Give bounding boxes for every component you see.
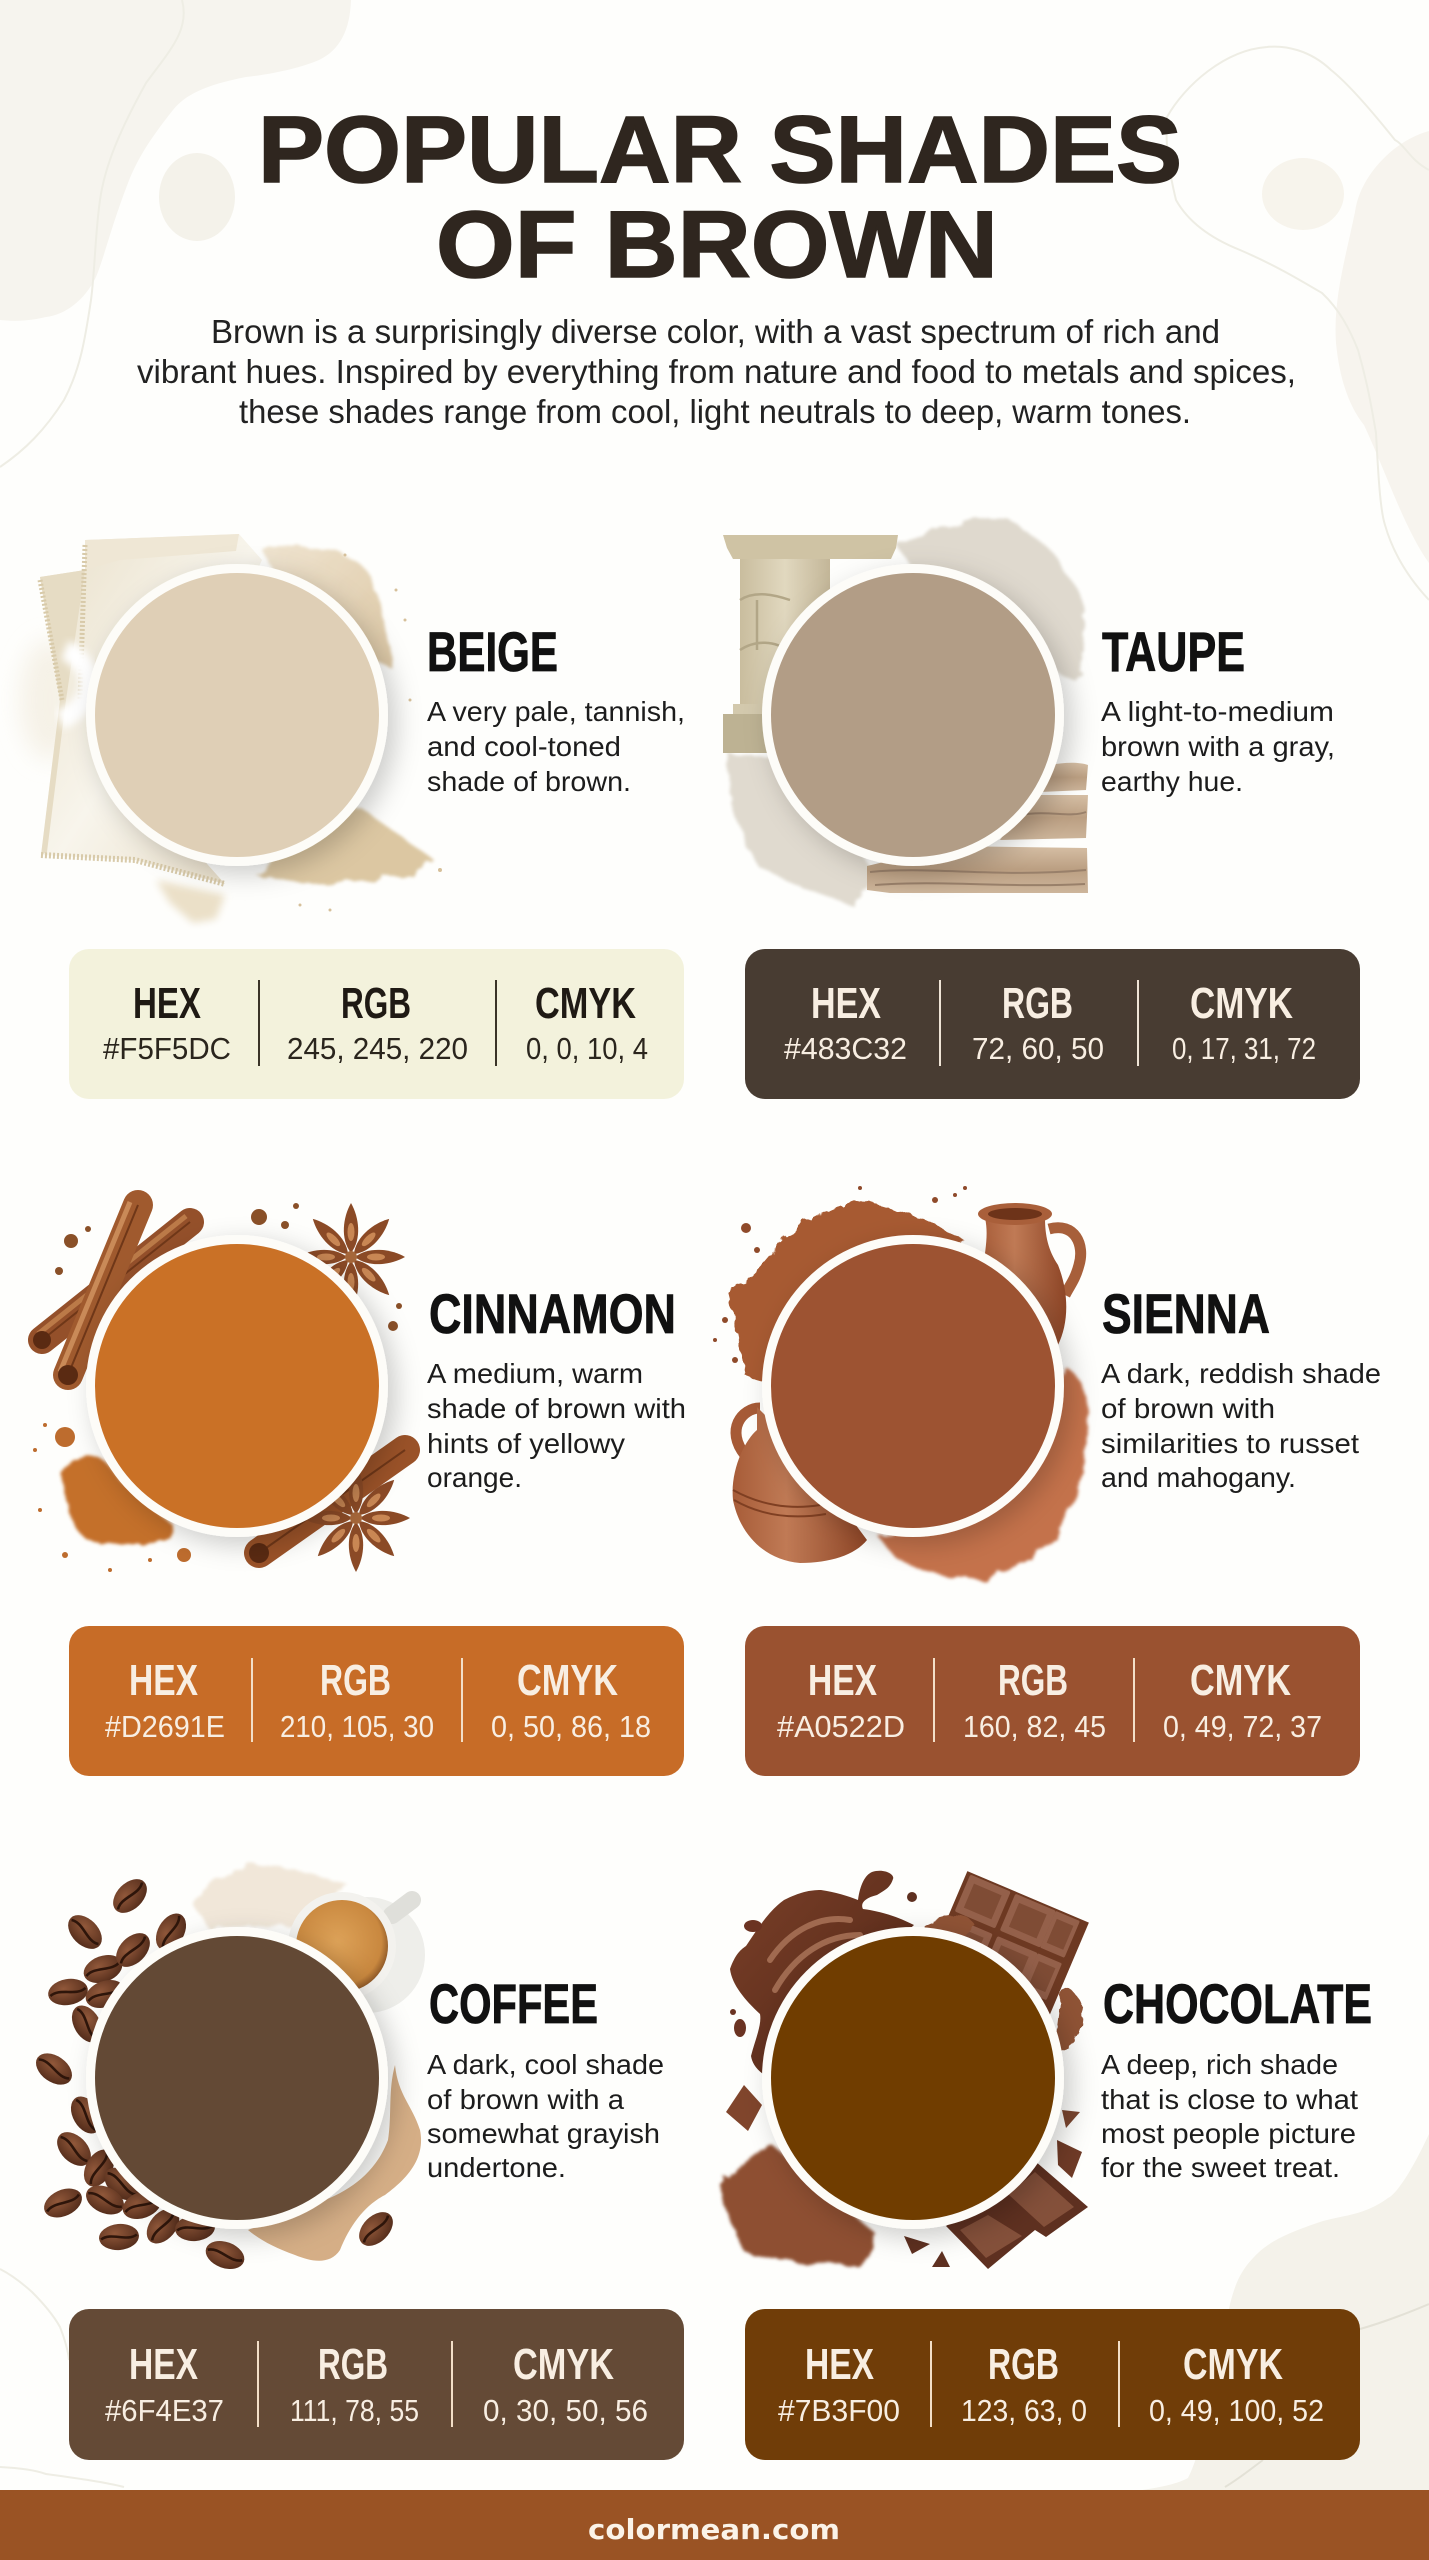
description: hints of yellowy — [427, 1428, 625, 1459]
description: orange. — [427, 1462, 522, 1493]
colour values bar: 123, 63, 0 — [961, 2393, 1087, 2428]
colour values bar: HEX — [133, 979, 201, 1028]
description — [427, 1358, 686, 1493]
description — [427, 2049, 664, 2183]
colour values bar — [745, 1626, 1360, 1776]
intro text: vibrant hues. Inspired by everything from nature and food to metals and spices, — [137, 353, 1296, 390]
colour values bar: RGB — [1002, 979, 1073, 1028]
description: brown with a gray, — [1101, 731, 1335, 762]
colour values bar: 0, 50, 86, 18 — [491, 1709, 651, 1744]
colour swatch — [90, 568, 384, 862]
colour values bar: 0, 49, 100, 52 — [1149, 2393, 1324, 2428]
illustration: linen cloth and sand — [20, 534, 442, 923]
description — [1101, 2049, 1358, 2183]
description: undertone. — [427, 2152, 566, 2183]
description: and mahogany. — [1101, 1462, 1296, 1493]
name: TAUPE — [1102, 620, 1245, 683]
description: shade of brown with — [427, 1393, 686, 1424]
description: and cool-toned — [427, 731, 621, 762]
colour values bar: CMYK — [1190, 979, 1293, 1028]
panel: chocolate — [719, 1871, 1372, 2460]
footer — [0, 2490, 1429, 2560]
description — [427, 696, 685, 797]
colour values bar: 0, 30, 50, 56 — [483, 2393, 648, 2428]
colour values bar: 0, 17, 31, 72 — [1172, 1031, 1316, 1066]
description: that is close to what — [1101, 2084, 1358, 2115]
colour swatch — [766, 1932, 1060, 2224]
description: of brown with a — [427, 2084, 624, 2115]
description: earthy hue. — [1101, 766, 1243, 797]
description: A light-to-medium — [1101, 696, 1334, 727]
description: A dark, cool shade — [427, 2049, 664, 2080]
description — [1101, 1358, 1381, 1493]
colour values bar: 210, 105, 30 — [280, 1709, 434, 1744]
colour values bar: HEX — [805, 2340, 874, 2389]
description: A very pale, tannish, — [427, 696, 685, 727]
panel: cinnamon — [33, 1202, 686, 1776]
colour values bar — [745, 2309, 1360, 2460]
colour values bar: #6F4E37 — [105, 2393, 224, 2428]
colour values bar: RGB — [318, 2340, 388, 2389]
colour values bar: CMYK — [1183, 2340, 1283, 2389]
panel: taupe — [723, 517, 1360, 1099]
colour values bar: CMYK — [513, 2340, 614, 2389]
colour values bar: #F5F5DC — [103, 1031, 231, 1066]
colour values bar — [69, 2309, 684, 2460]
panel: sienna — [713, 1186, 1381, 1776]
colour values bar: HEX — [808, 1656, 877, 1705]
colour values bar — [69, 1626, 684, 1776]
colour values bar: #A0522D — [777, 1709, 905, 1744]
description: of brown with — [1101, 1393, 1275, 1424]
title: POPULAR SHADES — [258, 97, 1182, 203]
colour values bar: HEX — [811, 979, 881, 1028]
description: A dark, reddish shade — [1101, 1358, 1381, 1389]
colour values bar: 160, 82, 45 — [963, 1709, 1106, 1744]
name: SIENNA — [1102, 1282, 1270, 1345]
illustration: clay pots and sienna pigment — [713, 1186, 1086, 1581]
description: somewhat grayish — [427, 2118, 660, 2149]
colour values bar: HEX — [129, 1656, 198, 1705]
colour values bar: 0, 49, 72, 37 — [1163, 1709, 1322, 1744]
colour values bar: RGB — [998, 1656, 1068, 1705]
description: shade of brown. — [427, 766, 631, 797]
panel: beige — [20, 534, 685, 1099]
colour values bar — [69, 949, 684, 1099]
colour values bar: #7B3F00 — [778, 2393, 900, 2428]
description: A deep, rich shade — [1101, 2049, 1338, 2080]
colour values bar: 245, 245, 220 — [287, 1031, 468, 1066]
description — [1101, 696, 1335, 797]
colour values bar: 0, 0, 10, 4 — [526, 1031, 648, 1066]
intro text: these shades range from cool, light neutrals to deep, warm tones. — [239, 393, 1191, 430]
colour values bar: RGB — [341, 979, 411, 1028]
illustration: stone column, clay and wood — [723, 517, 1088, 905]
description: similarities to russet — [1101, 1428, 1359, 1459]
illustration: chocolate bar, splash and cocoa — [719, 1871, 1089, 2269]
colour values bar — [745, 949, 1360, 1099]
intro text — [137, 313, 1296, 430]
title: OF BROWN — [436, 192, 998, 298]
colour swatch — [766, 568, 1060, 862]
colour values bar: CMYK — [517, 1656, 618, 1705]
colour values bar: 72, 60, 50 — [972, 1031, 1104, 1066]
colour values bar: RGB — [320, 1656, 391, 1705]
intro text: Brown is a surprisingly diverse color, with a vast spectrum of rich and — [211, 313, 1220, 350]
description: most people picture — [1101, 2118, 1356, 2149]
description: A medium, warm — [427, 1358, 643, 1389]
colour values bar: #D2691E — [105, 1709, 225, 1744]
name: CINNAMON — [429, 1282, 676, 1345]
title — [258, 97, 1182, 298]
colour swatch — [766, 1240, 1060, 1532]
colour values bar: 111, 78, 55 — [290, 2393, 419, 2428]
colour values bar: RGB — [988, 2340, 1059, 2389]
name: BEIGE — [427, 620, 558, 683]
illustration: cinnamon sticks, star anise and powder — [33, 1202, 410, 1572]
colour values bar: CMYK — [535, 979, 636, 1028]
panel: coffee — [30, 1865, 684, 2460]
illustration: coffee beans, cup and cream — [30, 1865, 425, 2274]
colour values bar: HEX — [129, 2340, 198, 2389]
name: COFFEE — [429, 1972, 598, 2035]
colour swatch — [90, 1932, 384, 2224]
colour values bar: CMYK — [1190, 1656, 1291, 1705]
footer: colormean.com — [588, 2513, 840, 2546]
colour swatch — [90, 1240, 384, 1532]
colour values bar: #483C32 — [784, 1031, 907, 1066]
description: for the sweet treat. — [1101, 2152, 1340, 2183]
